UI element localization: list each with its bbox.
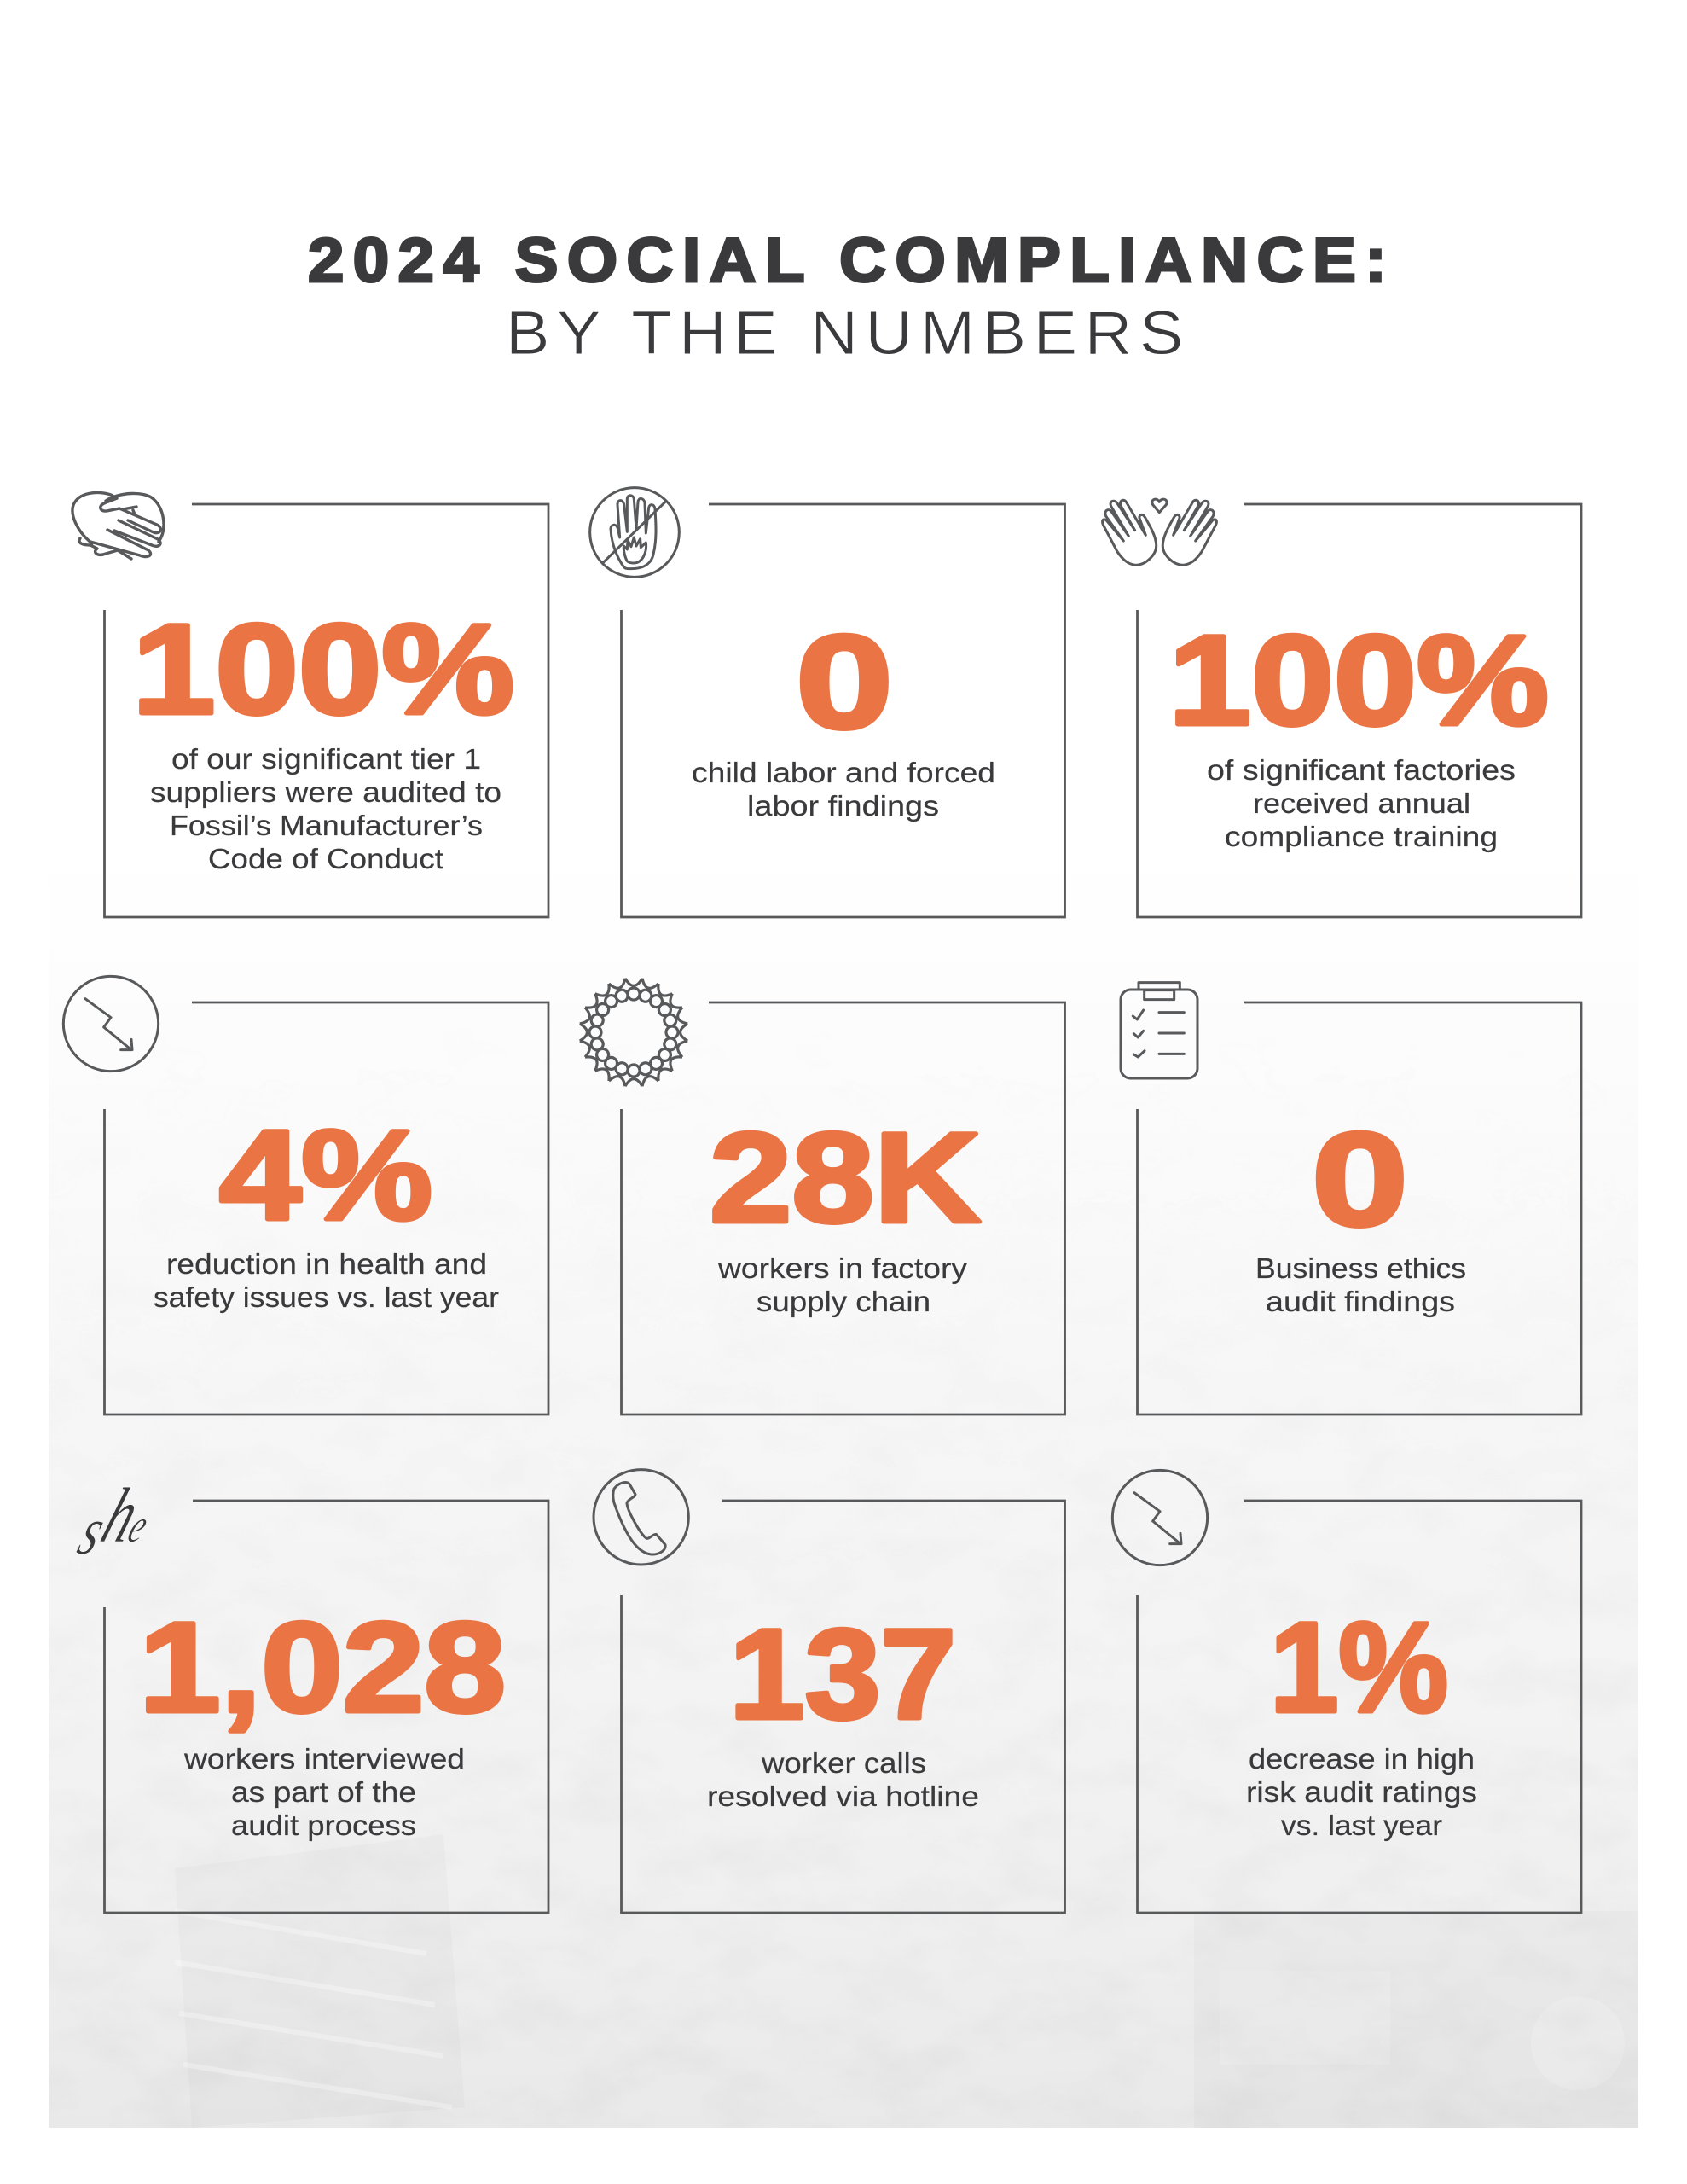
description: decrease in high [1249, 1743, 1475, 1774]
description [1246, 1743, 1477, 1841]
title line 1: 2024 SOCIAL COMPLIANCE: [308, 226, 1395, 295]
description: child labor and forced [692, 757, 995, 788]
description: audit process [231, 1809, 416, 1841]
description: safety issues vs. last year [154, 1281, 499, 1313]
description: compliance training [1225, 821, 1498, 852]
panel: health and safety reduction [104, 1002, 548, 1414]
icon: downward arrow circle [63, 976, 159, 1072]
description: vs. last year [1281, 1809, 1442, 1841]
description [717, 1252, 968, 1317]
title [308, 226, 1395, 368]
description: Business ethics [1255, 1252, 1466, 1284]
panel: business ethics [1138, 1002, 1581, 1414]
description: of our significant tier 1 [171, 743, 481, 775]
panel: high risk audit ratings [1138, 1501, 1581, 1913]
description: as part of the [231, 1776, 416, 1808]
description: Fossil’s Manufacturer’s [170, 810, 483, 841]
description: reduction in health and [166, 1248, 487, 1280]
icon: handwritten she: s [69, 1493, 116, 1569]
stat: 1,028: 1,028 [139, 1595, 506, 1739]
description: received annual [1253, 787, 1470, 819]
description [692, 757, 995, 822]
panel: child and forced labor [621, 504, 1064, 917]
panel: factory compliance training [1138, 504, 1581, 917]
description: risk audit ratings [1246, 1776, 1477, 1808]
icon: clipboard checklist [1121, 983, 1197, 1078]
icon: no child labor hand [590, 488, 679, 577]
icon: downward arrow circle [1112, 1470, 1208, 1565]
icon: phone circle [594, 1470, 688, 1565]
description: workers in factory [717, 1252, 968, 1284]
description: of significant factories [1207, 754, 1516, 786]
icon: hands and heart [1103, 499, 1216, 565]
title line 2: BY THE NUMBERS [506, 299, 1191, 368]
description [154, 1248, 499, 1313]
panel: tier 1 suppliers audited [104, 504, 548, 917]
description: Code of Conduct [208, 843, 443, 874]
stat: 1%: 1% [1270, 1595, 1448, 1739]
description: supply chain [757, 1286, 930, 1317]
icon: handwritten she: e [122, 1499, 156, 1552]
description: workers interviewed [183, 1743, 465, 1774]
stat: 100%: 100% [132, 597, 514, 741]
description: labor findings [747, 790, 939, 822]
stat: 0: 0 [796, 608, 893, 757]
description [707, 1747, 979, 1812]
stat: 28K: 28K [710, 1106, 981, 1249]
panel: workers interviewed [104, 1501, 548, 1913]
icon: handwritten she: h [92, 1472, 151, 1559]
stat: 137: 137 [729, 1602, 956, 1745]
panel: hotline calls [621, 1501, 1064, 1913]
description: suppliers were audited to [150, 776, 501, 808]
description: audit findings [1266, 1286, 1455, 1317]
background: faded factory photo [49, 1215, 1638, 2128]
description: worker calls [761, 1747, 926, 1779]
stat: 100%: 100% [1168, 608, 1549, 752]
description [183, 1743, 465, 1841]
description [1255, 1252, 1466, 1317]
description [1207, 754, 1516, 852]
panel: factory workers [621, 1002, 1064, 1414]
stat: 0: 0 [1312, 1106, 1408, 1254]
icon: circle of workers [580, 979, 687, 1086]
description: resolved via hotline [707, 1780, 979, 1812]
description [150, 743, 501, 874]
icon: handshake [72, 493, 164, 559]
stat: 4%: 4% [219, 1103, 432, 1246]
